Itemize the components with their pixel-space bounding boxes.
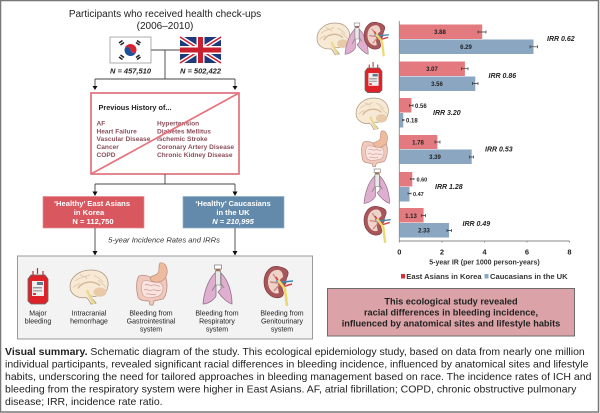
panel: exclusion criteria: [91, 93, 239, 174]
icon: blood bag: [28, 268, 48, 304]
outcome labels: hemorrhage: [70, 318, 108, 326]
panel: exclusion criteria: Diabetes Mellitus: [157, 128, 211, 135]
bars: major bleeding: 3.07: [426, 67, 438, 73]
outcome labels: system: [206, 326, 228, 334]
axis tick labels: 8: [567, 248, 572, 256]
bars: gastrointestinal: [400, 135, 513, 164]
outcome labels: [25, 310, 304, 334]
axis tick labels: 4: [482, 248, 487, 256]
N labels: cohorts: N = 457,510: [110, 66, 152, 76]
panel: Caucasians group: [183, 196, 284, 228]
bars: major bleeding: [400, 62, 516, 91]
icon: brain, lungs and kidney (overall): [317, 22, 389, 56]
text block: visual summary caption: [5, 346, 592, 408]
icon: South Korea flag: [110, 37, 151, 63]
title: [69, 9, 261, 32]
panel: Caucasians group: in the UK: [216, 208, 250, 217]
callout: conclusion: [328, 288, 574, 336]
arrows: groups to outcomes: [92, 228, 238, 256]
panel: Caucasians group: ‘Healthy’ Caucasians: [195, 199, 271, 208]
axes: [399, 21, 570, 242]
bars: gastrointestinal: IRR 0.53: [485, 146, 513, 154]
bars: respiratory: IRR 1.28: [435, 184, 463, 191]
outcome labels: Bleeding from: [195, 310, 239, 318]
outcome labels: Bleeding from: [129, 310, 173, 318]
bars: intracranial hemorrhage: [400, 98, 461, 128]
icon: GI row: [362, 131, 388, 167]
panel: exclusion criteria: Coronary Artery Disease: [157, 144, 234, 151]
outcome labels: Major: [29, 310, 47, 318]
panel: exclusion criteria: Vascular Disease: [96, 136, 151, 143]
icon: brain: [70, 270, 108, 304]
legend: [401, 272, 568, 281]
panel: exclusion criteria: AF: [96, 120, 105, 128]
callout: conclusion: This ecological study revealed: [384, 296, 518, 306]
callout: conclusion: influenced by anatomical sites and lifestyle habits: [342, 318, 560, 328]
bars: overall: 6.29: [460, 45, 472, 51]
bars: overall: [400, 24, 575, 54]
bars: respiratory: [400, 172, 463, 202]
bars: major bleeding: IRR 0.86: [488, 73, 516, 80]
panel: East Asians group: ‘Healthy’ East Asians: [54, 199, 130, 208]
panel: East Asians group: N = 112,750: [72, 217, 114, 226]
bars: overall: 3.88: [434, 30, 446, 36]
bars: genitourinary: [400, 208, 490, 238]
text block: visual summary caption: Visual summary. Schematic diagram of the study. This ecological epidemiology study, based on data from nearly one million: [5, 346, 585, 358]
connector: flags to exclusion box: [92, 50, 238, 90]
icon: gastrointestinal system: [137, 263, 167, 305]
icon: lungs row: [364, 169, 390, 203]
bars: gastrointestinal: 3.39: [429, 155, 441, 161]
outcome labels: Gastrointestinal: [127, 318, 176, 326]
bars: respiratory: 0.60: [416, 178, 427, 184]
bars: overall: IRR 0.62: [547, 36, 575, 43]
panel: exclusion criteria: Ischemic Stroke: [157, 136, 208, 143]
bars: genitourinary: IRR 0.49: [462, 221, 490, 228]
text block: visual summary caption: bleeding from the respiratory system were higher in East Asians. AF, atrial fibrillation; COPD, chronic obstructive pulmonary: [5, 384, 577, 396]
panel: exclusion criteria: Previous History of...: [98, 103, 172, 112]
connector: exclusion box to groups: [92, 174, 238, 196]
axis tick labels: 6: [525, 248, 529, 256]
outcome labels: Genitourinary: [261, 318, 304, 326]
N labels: cohorts: [110, 66, 222, 76]
axis title: 5-year IR (per 1000 person-years): [429, 260, 540, 266]
bars: genitourinary: 1.13: [405, 214, 417, 220]
panel: East Asians group: [43, 196, 144, 228]
axis tick labels: 2: [440, 248, 444, 256]
axis tick labels: 0: [397, 248, 401, 256]
outcome labels: bleeding: [25, 318, 51, 326]
outcome labels: system: [271, 326, 293, 334]
bars: intracranial hemorrhage: IRR 3.20: [433, 110, 461, 117]
bars: respiratory: 0.47: [413, 192, 424, 198]
outcome labels: Bleeding from: [260, 310, 304, 318]
bars: intracranial hemorrhage: 0.56: [415, 104, 427, 110]
title: (2006–2010): [137, 21, 193, 32]
bars: genitourinary: 2.33: [418, 228, 430, 234]
panel: exclusion criteria: Heart Failure: [96, 128, 137, 135]
text block: visual summary caption: habits, underscoring the need for tailored approaches in bleeding management based on race. The incidence rates of ICH and: [5, 371, 592, 383]
outcome labels: Intracranial: [72, 310, 107, 318]
panel: exclusion criteria: Hypertension: [157, 120, 199, 128]
icon: brain row: [356, 98, 388, 129]
text block: visual summary caption: disease; IRR, incidence rate ratio.: [5, 396, 163, 408]
axis tick labels: [397, 248, 572, 256]
icon: kidney row: [364, 206, 391, 243]
legend: East Asians in Korea: [406, 272, 482, 281]
N labels: cohorts: N = 502,422: [180, 66, 222, 76]
panel: exclusion criteria: Chronic Kidney Disease: [157, 152, 233, 159]
label: incidence rates: 5-year Incidence Rates and IRRs: [108, 236, 220, 244]
panel: East Asians group: in Korea: [74, 208, 105, 217]
outcome labels: system: [140, 326, 162, 334]
panel: Caucasians group: N = 210,995: [212, 217, 255, 226]
outcome labels: Respiratory: [199, 318, 235, 326]
bar chart: 5-year IR: [397, 21, 575, 266]
bars: intracranial hemorrhage: 0.18: [406, 118, 418, 124]
chart icons: [317, 22, 391, 243]
icon: blood bag row: [365, 62, 382, 93]
panel: exclusion criteria: Cancer: [96, 144, 119, 151]
panel: exclusion criteria: COPD: [96, 152, 116, 159]
legend: Caucasians in the UK: [490, 272, 568, 281]
callout: conclusion: racial differences in bleeding incidence,: [364, 308, 538, 318]
icon: UK flag: [180, 37, 221, 63]
bars: major bleeding: 3.56: [431, 82, 443, 88]
text block: visual summary caption: individual participants, revealed significant racial differences in bleeding incidence, influenced by anatomical sites and lifestyle: [5, 358, 589, 370]
panel: bleeding outcomes: [18, 256, 312, 339]
icon: kidney: [264, 266, 293, 306]
icon: lungs: [203, 265, 232, 304]
bars: gastrointestinal: 1.78: [412, 140, 424, 146]
title: Participants who received health check-ups: [69, 9, 261, 20]
